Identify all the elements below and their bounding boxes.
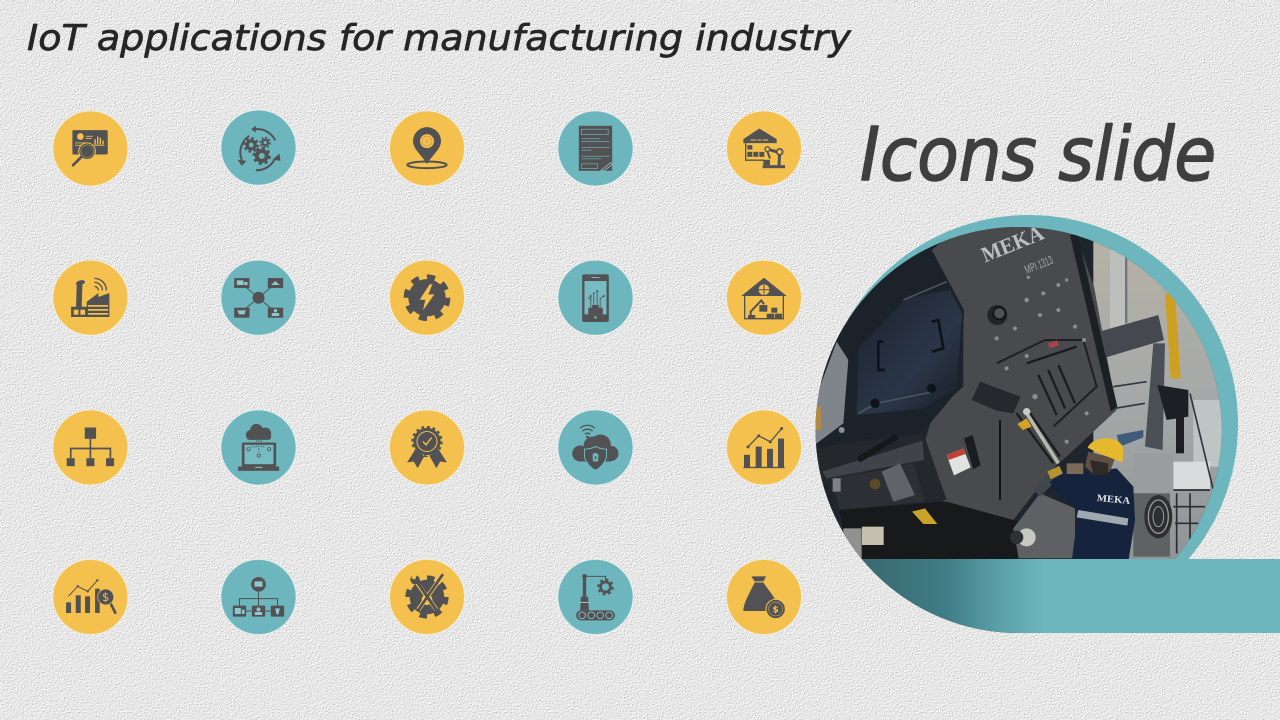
teal band with gradient: [862, 559, 1280, 633]
icon: robotic conveyor: [558, 560, 633, 634]
machine lettering: MEKA: [978, 220, 1047, 267]
icon: money bag and coin: [727, 560, 801, 634]
title: IoT applications for manufacturing industry: [27, 18, 852, 59]
icon: financial analysis: [53, 560, 128, 634]
left panel: [816, 342, 848, 444]
icon: secure cloud with wifi: [558, 410, 633, 485]
lower frame: [816, 440, 946, 500]
icon: hub network: [221, 260, 296, 335]
photo: worker at crusher machine: MPI 1313: [1023, 253, 1055, 277]
icon: gear with crossed tools: [390, 560, 464, 634]
motor wheel: [1133, 493, 1170, 557]
icon: gears with cycle arrows: [221, 110, 296, 185]
machine body: [923, 220, 1117, 520]
icon: money bag and coin: $: [773, 605, 779, 615]
icon: warehouse with robot arm: [727, 111, 801, 186]
icon: smartphone with circuit: [558, 260, 633, 335]
warning label: [947, 448, 971, 475]
icon: growth bar chart: [727, 410, 801, 485]
icon: smart factory: [53, 260, 128, 335]
icon: document with pen: [558, 111, 633, 186]
icon: cloud laptop: [221, 410, 296, 485]
icon: connected organisation chart: [221, 560, 296, 634]
truss: [1145, 343, 1165, 450]
icon: quality badge: [390, 410, 464, 485]
icon: location pin: [390, 111, 464, 186]
panel: icon grid: [53, 110, 801, 634]
icon: smart house with robot: [727, 260, 801, 335]
decorative teal circle behind photo: [845, 215, 1238, 559]
photo: worker at crusher machine: [816, 227, 1222, 633]
port: [987, 305, 1007, 325]
yellow pole: [1165, 293, 1181, 378]
icon: dashboard with magnifier: [53, 111, 128, 186]
hopper: [819, 242, 964, 424]
worker: [1035, 466, 1058, 496]
bolts: [995, 276, 1089, 444]
icon: hierarchy chart: [53, 410, 128, 485]
control rods: [997, 340, 1097, 427]
hydraulic cylinder: [1027, 413, 1058, 463]
photo: worker at crusher machine: MEKA: [1096, 493, 1131, 507]
heading: icons slide: Icons slide: [860, 112, 1216, 198]
icon: gear with lightning bolt: [390, 260, 464, 335]
icon: financial analysis: $: [102, 590, 109, 604]
dark beam: [1099, 315, 1164, 357]
